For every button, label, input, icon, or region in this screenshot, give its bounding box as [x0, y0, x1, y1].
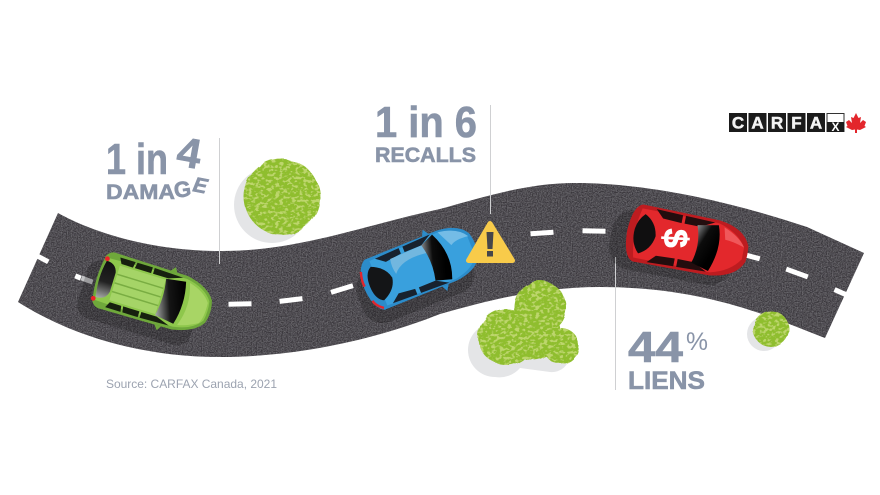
- source note: Source: CARFAX Canada, 2021: [106, 377, 277, 391]
- side windows: [647, 209, 716, 274]
- stat: 44% liens: 44: [628, 323, 684, 372]
- stat: 44% liens: [628, 323, 708, 395]
- leader line: liens: [614, 257, 616, 390]
- windshield: [154, 276, 189, 325]
- leader line: damage: [218, 138, 220, 264]
- exclamation mark: [486, 232, 494, 256]
- car: green SUV: [74, 243, 220, 352]
- icon: maple leaf: [846, 113, 866, 133]
- stat: 1 in 4 damage: [106, 128, 210, 204]
- car shadow: [605, 206, 738, 289]
- mirrors: [420, 228, 451, 292]
- road: [18, 183, 864, 357]
- car: red sedan with dollar sign: [605, 200, 753, 292]
- stat: 1 in 6 recalls: RECALLS: [375, 144, 476, 167]
- road centre dashes: [37, 228, 846, 307]
- stat: 1 in 4 damage: 1 in: [106, 135, 168, 184]
- rear window: [94, 260, 118, 300]
- body: [88, 250, 219, 340]
- stat: 1 in 4 damage: G: [172, 176, 193, 203]
- hood highlight: [722, 227, 747, 247]
- logo: CARFAX: [729, 113, 866, 134]
- car shadow: [74, 257, 204, 349]
- side windows: [105, 257, 183, 326]
- dollar sign: $: [656, 228, 695, 249]
- rear lights: [359, 269, 384, 312]
- rear window: [363, 261, 399, 303]
- tree: centre cluster: [468, 281, 579, 377]
- leader line: recalls: [490, 105, 492, 214]
- stat: 1 in 4 damage: E: [191, 173, 210, 199]
- body: [354, 219, 485, 314]
- windshield: [419, 232, 456, 285]
- logo: CARFAX: C: [732, 114, 744, 132]
- roof: [109, 266, 166, 314]
- body: [622, 202, 753, 283]
- stat: 1 in 4 damage: DAMA: [106, 181, 175, 204]
- logo: CARFAX: A: [751, 114, 764, 132]
- tree: small right: [747, 311, 789, 351]
- windshield: [689, 221, 722, 272]
- logo: CARFAX: R: [771, 114, 783, 132]
- icon: warning triangle: [468, 224, 512, 260]
- stat: 44% liens: LIENS: [628, 367, 705, 395]
- car shadow: [350, 233, 480, 329]
- tail lights: [104, 256, 110, 262]
- stat: 1 in 6 recalls: [375, 98, 477, 167]
- stat: 1 in 6 recalls: 1 in 6: [375, 98, 477, 147]
- roof highlight: [389, 245, 430, 274]
- side windows: [374, 234, 449, 305]
- stat: 44% liens: %: [686, 328, 708, 356]
- mirrors: [153, 266, 179, 331]
- stat: 1 in 4 damage: 4: [173, 128, 206, 178]
- logo: CARFAX: X: [831, 120, 840, 134]
- tree: top left: [234, 159, 320, 243]
- car: blue hatchback: [344, 213, 490, 329]
- hood: [177, 283, 212, 332]
- logo: CARFAX: F: [791, 114, 802, 132]
- hood highlight: [438, 222, 469, 248]
- rear window: [630, 213, 659, 256]
- logo: CARFAX: A: [810, 114, 822, 132]
